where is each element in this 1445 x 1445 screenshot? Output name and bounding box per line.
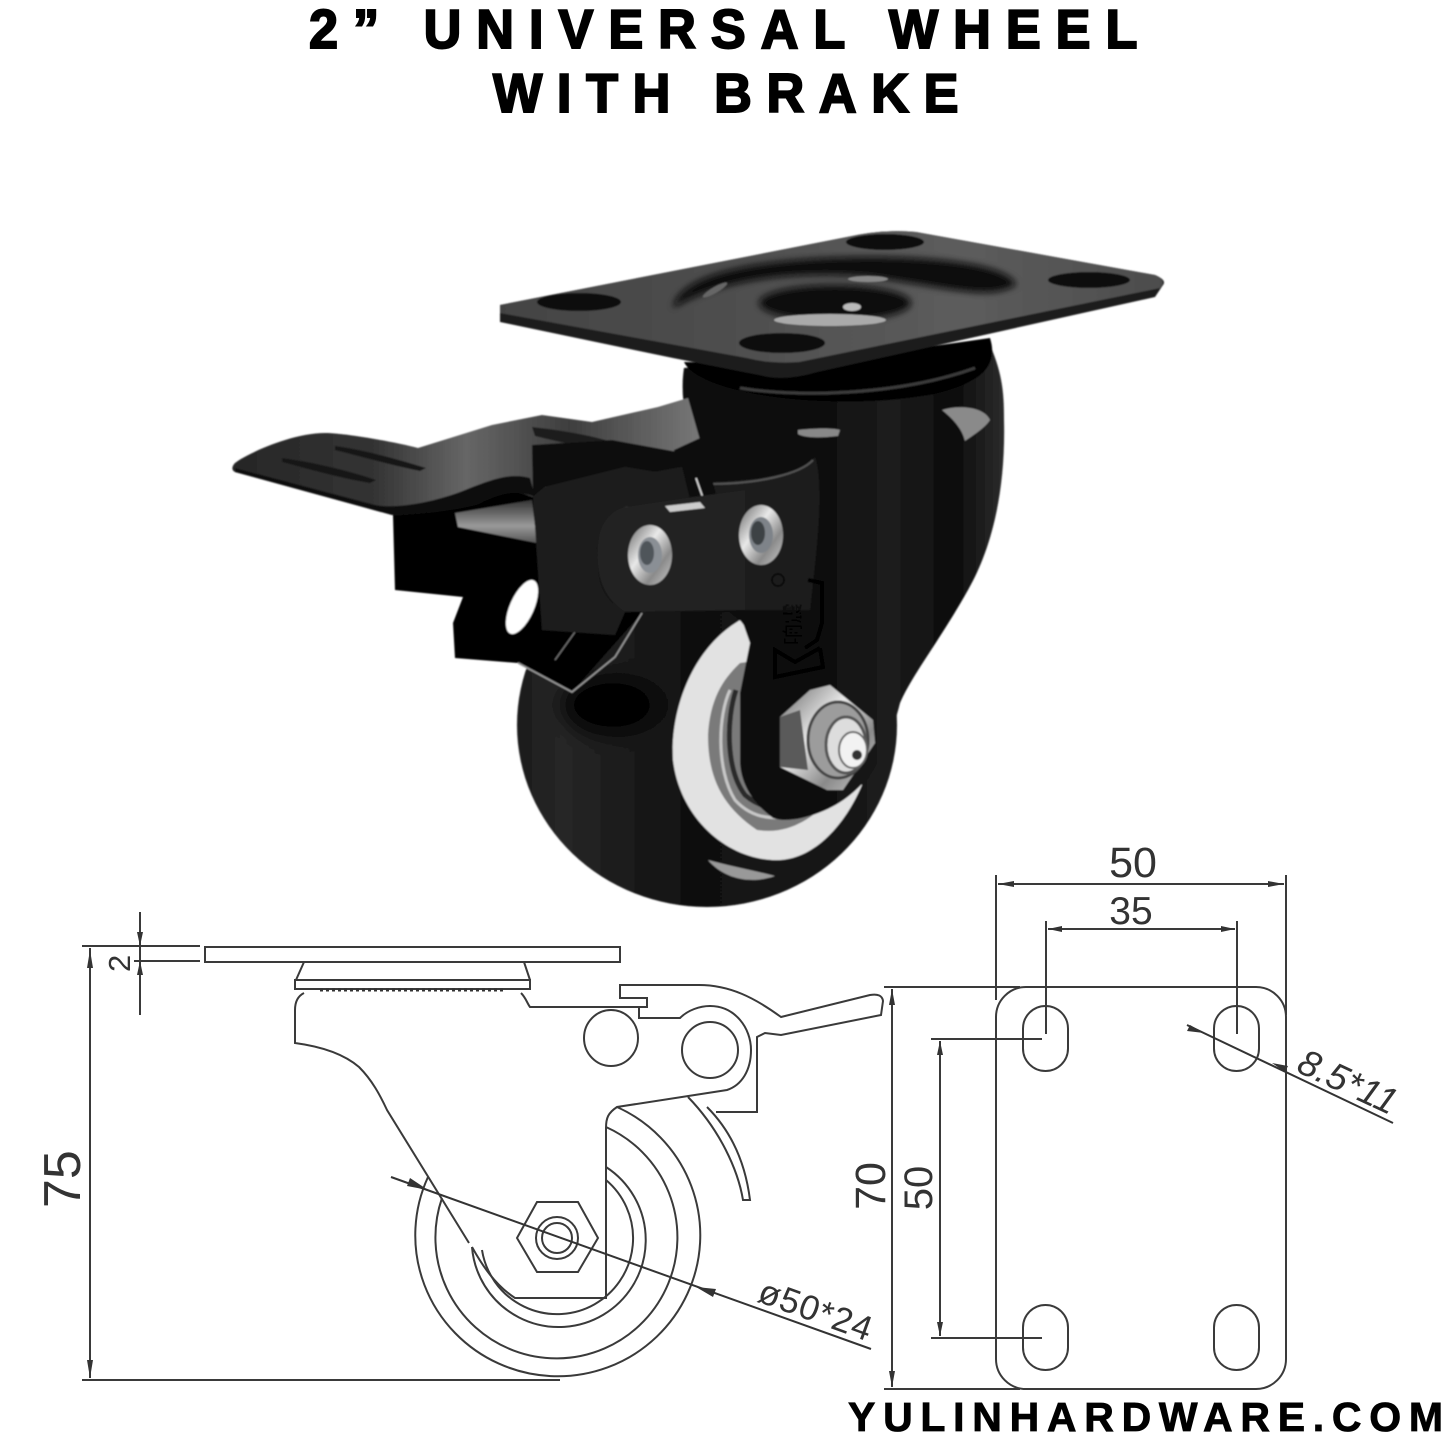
axle nut bbox=[780, 685, 875, 790]
tyre bbox=[517, 543, 897, 907]
plate side view bbox=[205, 947, 620, 962]
title: WITH BRAKE bbox=[493, 63, 959, 124]
wheel arcs bbox=[415, 1107, 700, 1376]
plate dish bbox=[673, 257, 1016, 326]
swivel fork outline bbox=[295, 993, 751, 1298]
neck below plate bbox=[684, 338, 992, 402]
slotted holes bbox=[1023, 1006, 1259, 1370]
fork highlights bbox=[700, 407, 990, 610]
axle nut bbox=[517, 1202, 598, 1272]
brand logo mark: 响震 bbox=[782, 603, 805, 645]
dimension: slot size: 8.5*11 bbox=[1292, 1041, 1404, 1123]
rivet left bbox=[628, 525, 672, 585]
brake arm with rivets bbox=[597, 490, 783, 612]
front bracket bbox=[533, 467, 690, 635]
mounting holes bbox=[537, 234, 1130, 353]
dimension: plate thickness: 2 bbox=[102, 955, 137, 972]
wheel rim bbox=[673, 620, 862, 860]
brake lower bracket bbox=[393, 480, 642, 692]
website footer: YULINHARDWARE.COM bbox=[848, 1394, 1443, 1440]
plate outline bbox=[996, 987, 1286, 1389]
dimension: plate thickness bbox=[82, 912, 200, 1015]
pivot holes bbox=[584, 1010, 738, 1078]
dimension: plate length 70 bbox=[847, 987, 1020, 1389]
brake pedal bbox=[232, 398, 718, 515]
side elevation drawing bbox=[34, 912, 883, 1380]
dimension: hole spacing 35 bbox=[1046, 890, 1237, 1034]
dimension: hole spacing 50 bbox=[897, 1039, 1042, 1338]
dimension: wheel diameter bbox=[391, 1177, 877, 1349]
dimension: slot size bbox=[1187, 1025, 1404, 1123]
spring clip bbox=[688, 1097, 750, 1200]
brand logo mark bbox=[772, 574, 823, 677]
title: 2” UNIVERSAL WHEEL bbox=[309, 0, 1137, 60]
dimension: wheel diameter: ø50*24 bbox=[753, 1272, 877, 1349]
title bbox=[309, 0, 1137, 124]
swivel fork body bbox=[596, 345, 1004, 820]
mounting plate bbox=[500, 231, 1164, 378]
dimension: plate length 70: 70 bbox=[847, 1162, 895, 1210]
dimension: overall height: 75 bbox=[34, 1150, 92, 1208]
dimension: hole spacing 35: 35 bbox=[1109, 890, 1153, 933]
caster wheel photo bbox=[232, 231, 1164, 907]
rivet right bbox=[739, 505, 783, 565]
turntable bbox=[295, 962, 530, 990]
dimension: overall height bbox=[34, 948, 560, 1380]
dimension: hole spacing 50: 50 bbox=[897, 1166, 941, 1210]
dimension: plate width 50: 50 bbox=[1109, 839, 1157, 887]
dimension: plate width 50 bbox=[996, 839, 1286, 1015]
brake lever outline bbox=[620, 985, 883, 1112]
top plate plan drawing bbox=[847, 839, 1404, 1389]
